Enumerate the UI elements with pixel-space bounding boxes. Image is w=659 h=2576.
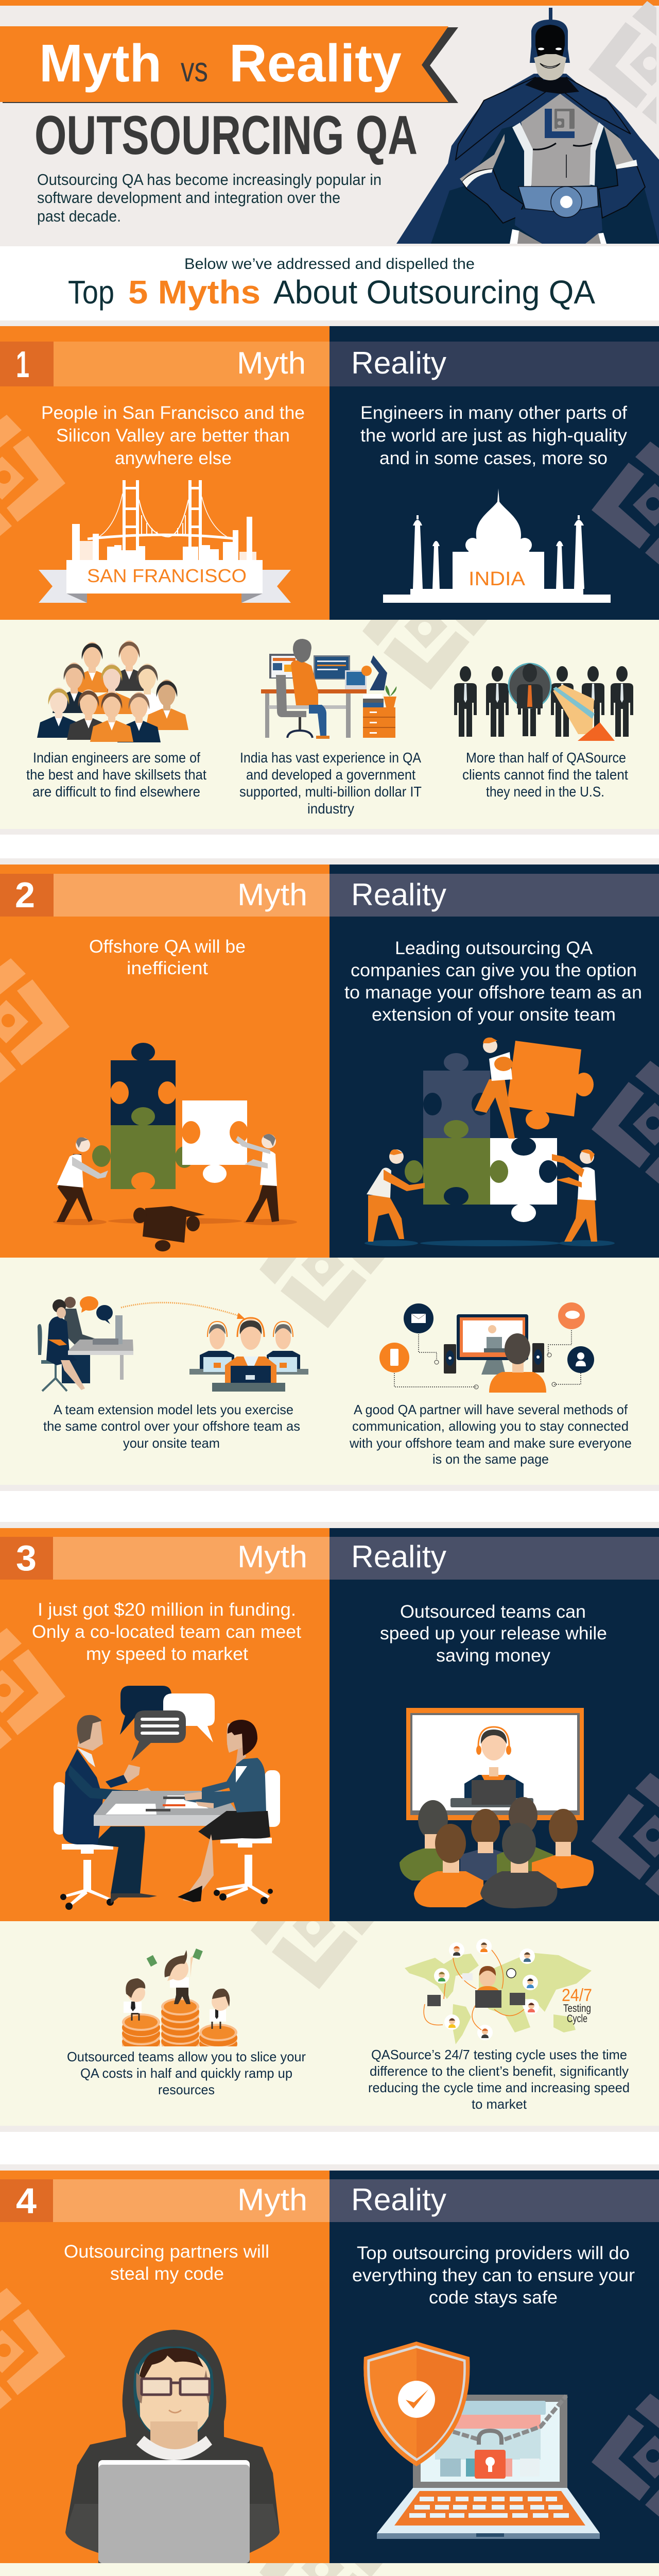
text: testing cycle: QASource’s 24/7 testing cycle uses the time xyxy=(371,2047,627,2062)
icon: taj mahal: INDIA xyxy=(469,568,526,590)
panel: reality 3 xyxy=(330,1528,659,1921)
text: testing cycle: reducing the cycle time and increasing speed xyxy=(368,2080,630,2095)
supporting facts panel 1 xyxy=(0,601,659,829)
supporting facts panel 4 xyxy=(0,2543,659,2576)
panel: reality 1 xyxy=(330,326,659,620)
intro heading: Below we’ve addressed and dispelled the xyxy=(184,256,475,273)
myth statement xyxy=(64,2242,269,2284)
panel: myth 2: Myth xyxy=(237,877,307,912)
myth statement: anywhere else xyxy=(115,448,232,468)
reality statement: speed up your release while xyxy=(380,1623,607,1643)
icon: global 24/7 map: Cycle xyxy=(567,2013,587,2025)
speech bubbles xyxy=(120,1686,215,1761)
icon: coin stacks and savings xyxy=(122,1948,237,2046)
reality statement: companies can give you the option xyxy=(351,960,637,980)
person pushing right xyxy=(552,1149,597,1242)
panel: reality 1: Reality xyxy=(351,346,446,380)
intro heading: About Outsourcing QA xyxy=(273,274,595,311)
icon: global 24/7 map: Testing xyxy=(563,2003,591,2014)
text: IT industry: supported, multi-billion dollar IT xyxy=(239,784,422,800)
text: slicing cost: resources xyxy=(158,2082,215,2097)
icon: san francisco ribbon xyxy=(39,560,291,603)
icon: team at laptop xyxy=(38,1296,133,1391)
intro paragraph xyxy=(37,171,381,225)
icon: global 24/7 map: 24/7 xyxy=(562,1986,592,2005)
reality statement: code stays safe xyxy=(429,2287,558,2308)
icon: engineer at desk xyxy=(261,639,396,739)
text: skillsets xyxy=(26,750,206,800)
myth statement: Outsourcing partners will xyxy=(64,2242,269,2262)
text: IT industry: India has vast experience in QA xyxy=(240,750,421,766)
reality statement: extension of your onsite team xyxy=(372,1005,616,1025)
header hero xyxy=(0,0,659,246)
reality statement: everything they can to ensure your xyxy=(352,2265,635,2285)
reality statement: Top outsourcing providers will do xyxy=(357,2243,630,2263)
text: testing cycle xyxy=(368,2047,630,2112)
text: talent gap: clients cannot find the talent xyxy=(462,767,628,783)
icon: global 24/7 map xyxy=(405,1939,592,2044)
title banner: Myth xyxy=(39,33,162,93)
section 1 xyxy=(0,326,659,829)
panel: reality 4 xyxy=(330,2171,659,2563)
heading: outsourcing QA: OUTSOURCING QA xyxy=(34,104,418,166)
reality statement xyxy=(352,2243,635,2308)
supporting facts panel 2 xyxy=(0,1240,659,1485)
panel: myth 4: Myth xyxy=(237,2182,307,2217)
text: testing cycle: difference to the client’s benefit, significantly xyxy=(370,2063,629,2079)
intro heading: 5 Myths xyxy=(128,274,261,311)
icon: talent search xyxy=(454,664,633,741)
reality statement: saving money xyxy=(436,1646,551,1666)
myth statement xyxy=(32,1600,301,1664)
reality statement: to manage your offshore team as an xyxy=(344,982,642,1003)
reality statement: Outsourced teams can xyxy=(400,1602,586,1622)
panel: myth 1: Myth xyxy=(237,346,306,380)
text: talent gap: they need in the U.S. xyxy=(486,784,604,800)
table xyxy=(94,1791,240,1826)
reality statement: Engineers in many other parts of xyxy=(360,403,627,423)
text: communication: with your offshore team and make sure everyone xyxy=(349,1435,632,1451)
text: skillsets: are difficult to find elsewhere xyxy=(32,784,200,800)
panel: reality 3: Reality xyxy=(351,1539,446,1574)
reality statement xyxy=(344,938,642,1025)
chairs xyxy=(54,1770,280,1910)
myth statement: People in San Francisco and the xyxy=(41,403,305,423)
reality statement xyxy=(360,403,628,468)
myth statement: Offshore QA will be xyxy=(89,937,246,957)
myth statement: my speed to market xyxy=(86,1644,248,1664)
panel: myth 4 xyxy=(0,2171,330,2563)
myth statement xyxy=(89,937,246,978)
icon: headset support team xyxy=(189,1318,308,1392)
text: IT industry xyxy=(239,750,422,817)
myth statement xyxy=(41,403,305,468)
reality statement: the world are just as high-quality xyxy=(360,426,628,446)
panel: reality 4: Reality xyxy=(351,2182,446,2217)
text: skillsets: Indian engineers are some of xyxy=(33,750,200,766)
text: team extension: A team extension model lets you exercise xyxy=(54,1402,293,1417)
panel: myth 2: 2 xyxy=(15,875,35,915)
text: communication: is on the same page xyxy=(432,1451,549,1467)
text: communication: communication, allowing you to stay connected xyxy=(352,1418,629,1434)
panel: myth 1 xyxy=(0,326,330,620)
man xyxy=(63,1715,157,1904)
person pushing left xyxy=(57,1137,108,1222)
reality statement: Leading outsourcing QA xyxy=(395,938,593,958)
panel: reality 2: Reality xyxy=(351,877,446,912)
myth statement: inefficient xyxy=(127,958,208,978)
myth statement: I just got $20 million in funding. xyxy=(38,1600,296,1620)
text: testing cycle: to market xyxy=(472,2096,527,2112)
panel: myth 3 xyxy=(0,1528,330,1921)
text: IT industry: industry xyxy=(307,801,354,817)
panel: myth 1: 1 xyxy=(16,344,29,385)
person on puzzle xyxy=(475,1038,515,1139)
panel: reality 2 xyxy=(330,865,659,1258)
text: team extension xyxy=(43,1402,300,1451)
panel: myth 3: 3 xyxy=(16,1538,37,1578)
text: communication: A good QA partner will have several methods of xyxy=(354,1402,628,1417)
icon: taj mahal xyxy=(383,488,611,603)
person pushing right xyxy=(236,1134,279,1222)
section 4 xyxy=(0,2171,659,2576)
text: communication xyxy=(349,1402,632,1467)
audience xyxy=(400,1797,594,1908)
myth statement: steal my code xyxy=(110,2264,224,2284)
intro paragraph: software development and integration over the xyxy=(37,189,340,207)
intro paragraph: Outsourcing QA has become increasingly popular in xyxy=(37,171,381,189)
intro heading xyxy=(68,256,595,311)
section 3 xyxy=(0,1528,659,2126)
text: skillsets: the best and have skillsets that xyxy=(26,767,206,783)
text: IT industry: and developed a government xyxy=(246,767,415,783)
panel: myth 4: 4 xyxy=(16,2181,37,2221)
title banner xyxy=(0,26,458,103)
illustration: video conference xyxy=(400,1708,594,1908)
title banner: vs xyxy=(181,50,208,89)
reality statement xyxy=(380,1602,607,1666)
icon: san francisco ribbon: SAN FRANCISCO xyxy=(87,565,247,586)
text: slicing cost: QA costs in half and quickly ramp up xyxy=(80,2065,292,2081)
illustration: meeting xyxy=(54,1686,280,1910)
arrow: dashed link xyxy=(121,1302,245,1319)
text: team extension: your onsite team xyxy=(123,1435,220,1451)
section 2 xyxy=(0,865,659,1485)
panel: myth 2 xyxy=(0,865,330,1258)
text: slicing cost: Outsourced teams allow you to slice your xyxy=(67,2049,306,2064)
icon: engineers group xyxy=(37,640,188,742)
illustration: assembled puzzle xyxy=(365,1038,615,1246)
myth statement: Silicon Valley are better than xyxy=(56,426,290,446)
icon: golden gate bridge skyline xyxy=(72,480,256,560)
icon: communication channels xyxy=(379,1302,594,1393)
illustration: hooded hacker xyxy=(65,2330,280,2563)
panel: myth 3: Myth xyxy=(237,1539,307,1574)
text: slicing cost xyxy=(67,2049,306,2097)
text: team extension: the same control over your offshore team as xyxy=(43,1418,300,1434)
text: talent gap: More than half of QASource xyxy=(466,750,626,766)
superhero illustration xyxy=(396,8,659,244)
title banner: Reality xyxy=(229,33,402,93)
illustration: misaligned puzzle xyxy=(53,1043,297,1251)
intro paragraph: past decade. xyxy=(37,207,121,225)
reality statement: and in some cases, more so xyxy=(379,448,608,468)
illustration: locked laptop and shield xyxy=(363,2342,600,2539)
woman xyxy=(178,1720,270,1902)
supporting facts panel 3 xyxy=(0,1901,659,2126)
text: talent gap xyxy=(462,750,628,800)
person pushing left xyxy=(367,1149,425,1242)
myth statement: Only a co-located team can meet xyxy=(32,1622,301,1642)
intro heading: Top xyxy=(68,274,114,311)
